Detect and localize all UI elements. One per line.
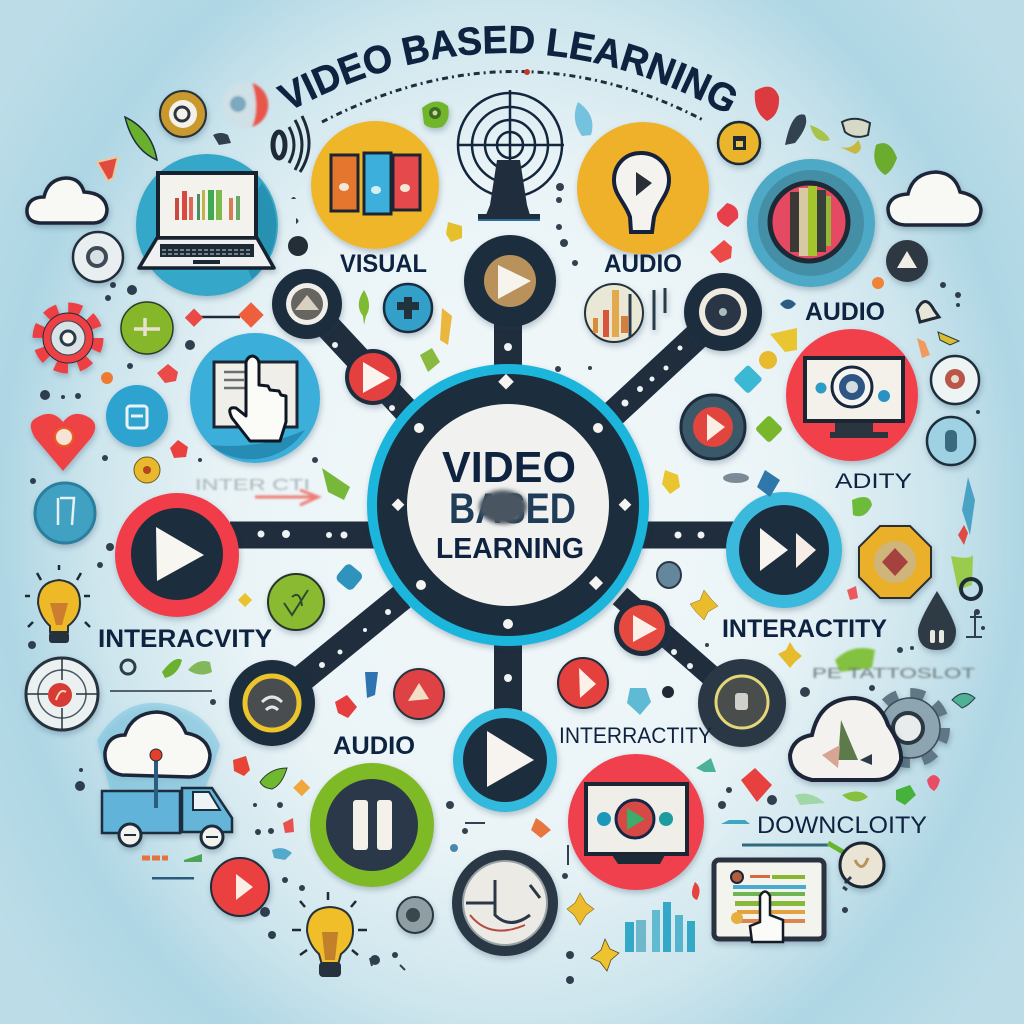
icon: dark drop [918,591,956,650]
icon: red connector [185,302,264,328]
icon: yellow stars bottom [531,818,700,971]
icon: red symbol disc [394,669,444,719]
red arrow faded [255,490,318,505]
icon: ring right lower [927,417,975,465]
icon: target ring [26,658,98,730]
label: adity: ADITY [835,470,912,493]
icon: light bulb bottom [292,892,367,977]
icon: cyan badge [106,385,168,447]
label: interactity right: INTERACTITY [722,615,887,643]
icon: dark dot [288,236,308,256]
icon: leaf [125,117,157,160]
icon: ring bottom right [840,843,884,887]
icon: small leaf [359,290,369,325]
title: VIDEO BASED LEARNING [276,26,736,112]
icon: red shield [97,157,118,181]
text: faded caption right: PE TATTOSLOT [812,665,975,682]
label: audio right: AUDIO [805,298,885,326]
text: faded caption right [812,648,975,682]
icon: small grey disc [397,897,433,933]
icon: green teal marker [952,693,975,708]
label: audio lower: AUDIO [333,732,415,760]
node: right fast forward [726,492,842,608]
icons: right side small [917,302,959,358]
icon: chart ball [585,284,665,342]
panel: visual cards [311,121,439,249]
icon: green clock [121,302,173,354]
label: visual: VISUAL [340,250,427,278]
icon: blurred figure [222,82,268,128]
label: audio top: AUDIO [604,250,682,278]
bar chart [625,902,695,952]
icon: blue leaf [575,102,592,136]
icon: yellow stars right [690,590,802,668]
icon: ring left [73,232,123,282]
icon: diamonds [733,277,884,443]
small marks under label left [110,659,212,691]
node: top play [464,235,556,327]
label: interractity lower: INTERRACTITY [559,723,712,748]
icon: cloud right [888,172,981,225]
small coloured shapes left [101,222,462,500]
icon: red balloons [710,203,738,263]
panel: clock dial [452,850,558,956]
icon: red play lower left [211,858,269,916]
label: downcloity: DOWNCLOITY [757,812,927,839]
small dark marks [28,133,985,984]
hub text: video: VIDEO [442,443,576,492]
panel: laptop [136,154,278,296]
icon: ring right upper [931,356,979,404]
icons: top right small [755,87,897,175]
small shapes mid left [238,562,378,718]
central hub [367,364,649,646]
panel: equalizer circle [747,159,875,287]
icon: heart [31,414,95,471]
node: left play [115,493,239,617]
node: red play lower right [614,600,670,656]
icon: gold ring [160,91,206,137]
dotted arc under title [322,69,703,122]
label: interacvity left: INTERACVITY [98,625,272,653]
icon: red play small right [558,658,608,708]
node: upper right [684,273,762,351]
node: lower left [229,660,315,746]
icon: truck with cloud [97,703,232,848]
icon: radar tower [458,90,564,221]
icon: sound wave [273,116,309,172]
panel: book and hand [190,333,320,463]
icon: gold octagon [859,526,931,598]
node: upper left [272,269,342,339]
panel: green pause [310,763,434,887]
node: lower right [698,659,786,747]
panel: red monitor [568,754,704,890]
text: faded interactivity: INTER CTI [195,477,310,494]
hub text: learning: LEARNING [436,533,584,565]
icon: cloud right lower [790,698,901,780]
hub text: based: BASED [449,485,576,533]
icon: yellow ring top right [718,122,760,164]
node: bottom play [453,708,557,812]
panel: tablet [714,860,824,942]
spokes [230,304,742,720]
panel: monitor with camera [786,329,918,461]
icon: light bulb left [25,565,90,643]
icon: cloud left [27,178,107,223]
icon: cyan badge lower [35,483,95,543]
icon: gear grey [876,694,944,762]
icon: green square [422,101,449,128]
icon: red play disc [681,395,745,459]
icon: green tick disc [268,574,324,630]
hub text smudge [479,490,527,524]
small shapes bottom right [627,562,940,852]
icon: cyan person [384,284,432,332]
icon: dark triangle disc [886,240,928,282]
icons: far right small [847,477,981,600]
small shapes centre right [662,470,780,497]
icon: red gear [38,308,98,368]
panel: audio bulb [577,122,709,254]
node: red play upper left [345,349,401,405]
small shapes lower left [142,756,310,880]
